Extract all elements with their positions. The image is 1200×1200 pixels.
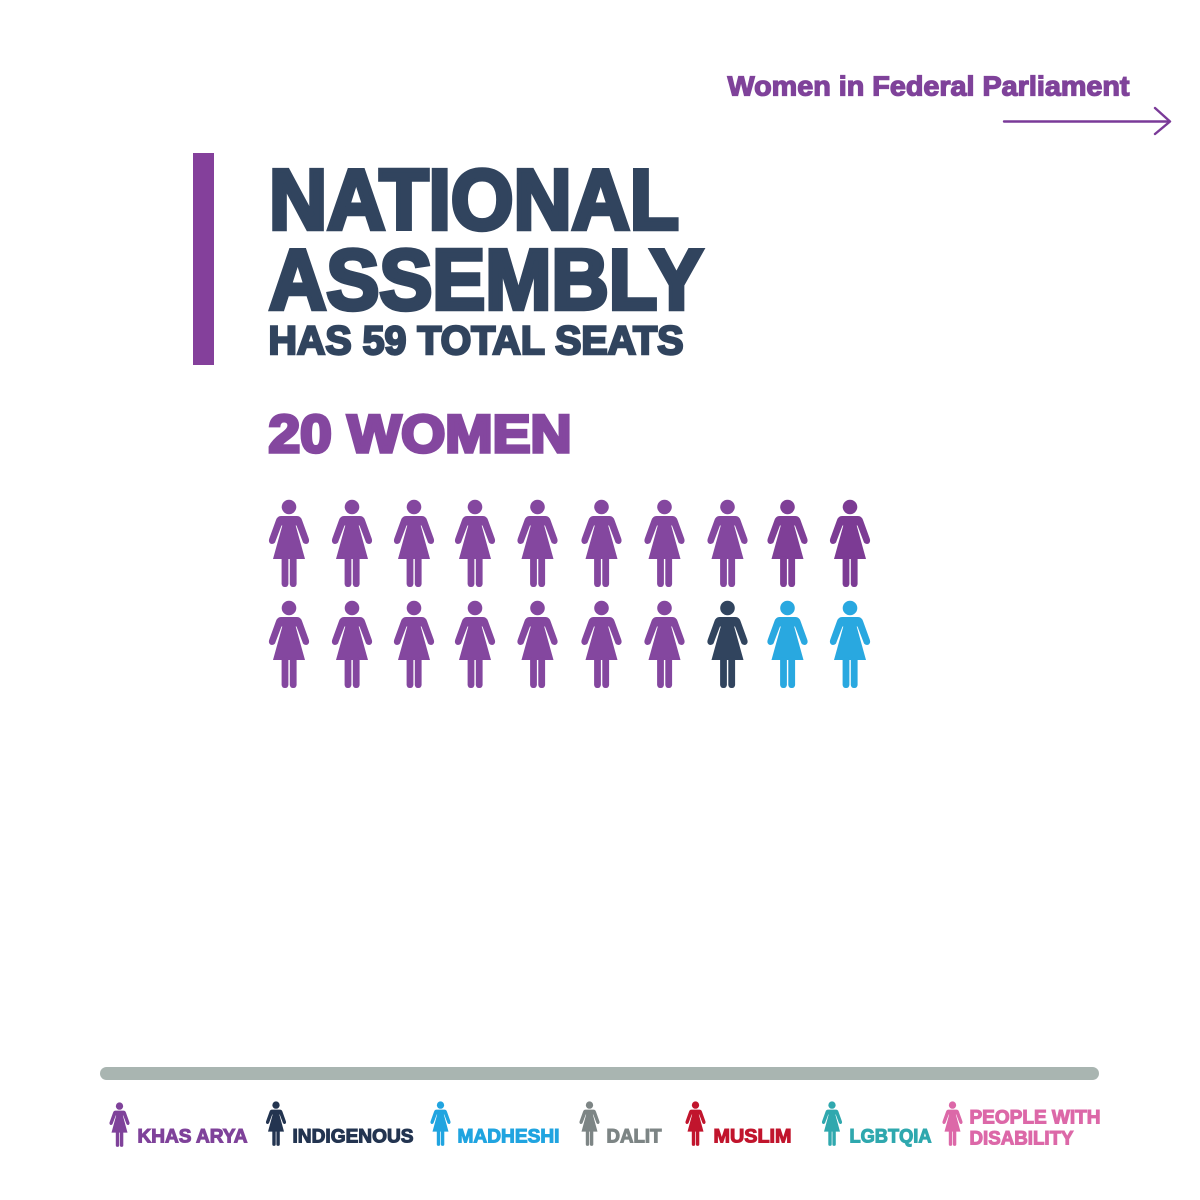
legend item: Madheshi xyxy=(430,1101,560,1148)
legend item: Dalit xyxy=(579,1101,662,1148)
legend divider bar xyxy=(100,1067,1099,1080)
title: HAS 59 TOTAL SEATS xyxy=(268,319,684,363)
title: ASSEMBLY xyxy=(269,233,703,328)
arrow xyxy=(1004,108,1170,134)
subtitle: 20 women: 20 WOMEN xyxy=(268,405,572,464)
title: NATIONAL xyxy=(269,153,679,248)
legend item: Dalit: DALIT xyxy=(606,1126,662,1148)
legend item: Indigenous: INDIGENOUS xyxy=(292,1126,414,1148)
legend item: Khas Arya: KHAS ARYA xyxy=(138,1126,248,1148)
legend item: LGBTQIA xyxy=(822,1101,932,1148)
row 1 xyxy=(269,500,870,587)
legend xyxy=(109,1101,1101,1150)
legend item: People with disability xyxy=(942,1101,1100,1150)
legend item: People with disability: DISABILITY xyxy=(970,1128,1074,1150)
legend item: Muslim: MUSLIM xyxy=(714,1126,792,1148)
section label: Women in Federal Parliament: Women in Federal Parliament xyxy=(728,70,1130,102)
title xyxy=(268,153,703,363)
legend item: Muslim xyxy=(685,1101,792,1148)
legend item: Indigenous xyxy=(266,1101,414,1148)
legend item: People with disability: PEOPLE WITH xyxy=(970,1106,1100,1128)
legend item: Madheshi: MADHESHI xyxy=(458,1126,560,1148)
accent bar xyxy=(193,153,214,365)
legend item: Khas Arya xyxy=(109,1102,248,1148)
legend item: LGBTQIA: LGBTQIA xyxy=(850,1126,932,1148)
pictogram chart: 20 women xyxy=(269,500,870,688)
row 2 xyxy=(269,601,870,688)
